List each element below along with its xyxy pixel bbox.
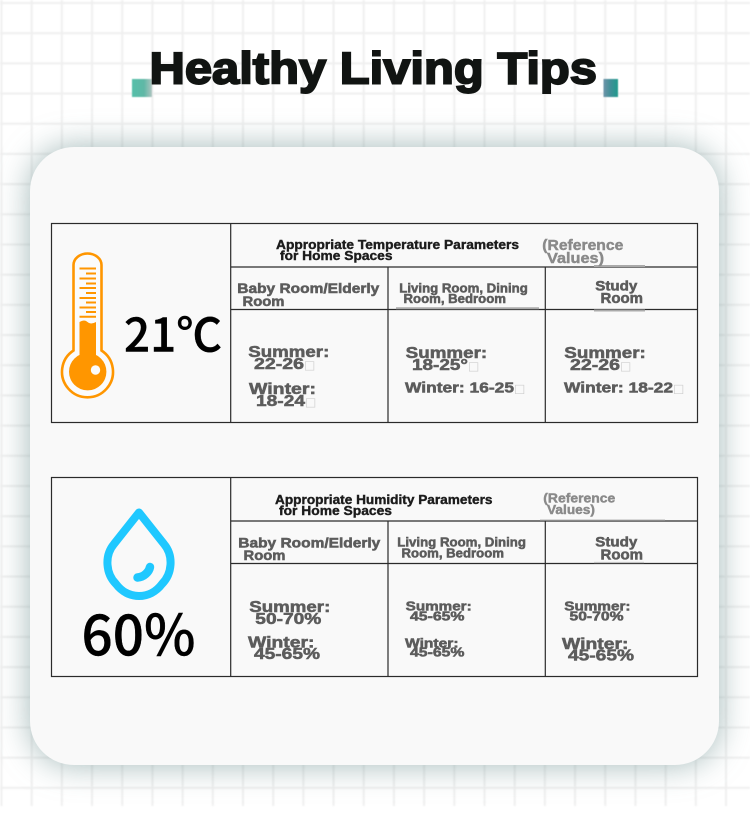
column: baby room: Baby Room/Elderly bbox=[238, 534, 381, 550]
column: baby room bbox=[237, 280, 380, 410]
title: Healthy Living Tips bbox=[150, 44, 597, 94]
column: baby room: Winter: bbox=[249, 381, 316, 398]
table heading bbox=[275, 491, 615, 518]
column: baby room: Summer: bbox=[248, 344, 329, 361]
table heading: for Home Spaces bbox=[280, 248, 392, 263]
column: baby room: 22-26 bbox=[254, 356, 304, 373]
column: living room: Room, Bedroom bbox=[404, 291, 506, 306]
column: study room: Winter: 18-22 bbox=[564, 380, 673, 397]
column: living room: Room, Bedroom bbox=[402, 545, 504, 560]
column: study room: Summer: bbox=[564, 345, 646, 362]
column: living room: 45-65% bbox=[410, 609, 465, 624]
panel: temperature table bbox=[52, 224, 698, 422]
column: study room: Summer: bbox=[564, 599, 630, 614]
column: living room: Summer: bbox=[406, 599, 472, 614]
column: study room: Winter: bbox=[562, 636, 628, 653]
table heading: Values) bbox=[547, 251, 604, 267]
column: living room: □ bbox=[514, 382, 525, 396]
column: study room: 45-65% bbox=[568, 648, 634, 665]
column: living room bbox=[399, 280, 528, 397]
table heading: (Reference bbox=[542, 238, 623, 254]
table heading bbox=[276, 237, 623, 267]
column: baby room: Winter: bbox=[248, 634, 314, 651]
column: living room: Living Room, Dining bbox=[397, 535, 526, 550]
icon: water drop bbox=[107, 512, 171, 596]
column: living room: □ bbox=[468, 359, 479, 373]
column: study room: □ bbox=[620, 359, 631, 373]
column: study room: Room bbox=[600, 547, 643, 563]
table heading: Appropriate Humidity Parameters bbox=[275, 492, 492, 507]
column: study room: Study bbox=[595, 534, 638, 550]
column: study room bbox=[562, 534, 643, 665]
column: baby room: Baby Room/Elderly bbox=[237, 280, 380, 296]
humidity value: 60% bbox=[82, 591, 196, 672]
column: living room: Living Room, Dining bbox=[399, 280, 528, 295]
column: baby room: Summer: bbox=[249, 599, 330, 616]
table heading: (Reference bbox=[543, 491, 615, 506]
column: living room bbox=[397, 535, 526, 660]
column: living room: Summer: bbox=[406, 345, 487, 362]
temperature value: 21℃ bbox=[124, 300, 222, 366]
icon: thermometer bbox=[62, 254, 113, 397]
column: living room: Winter: bbox=[405, 635, 458, 650]
column: living room: 45-65% bbox=[410, 645, 465, 660]
column: study room: Study bbox=[595, 278, 638, 294]
column: study room: □ bbox=[673, 382, 684, 396]
column: baby room: □ bbox=[305, 395, 316, 409]
column: baby room: Room bbox=[244, 547, 286, 563]
table heading: Appropriate Temperature Parameters bbox=[276, 237, 519, 252]
column: baby room: Room bbox=[242, 293, 284, 309]
table heading: Values) bbox=[547, 502, 595, 517]
column: study room bbox=[564, 278, 684, 397]
column: baby room: 18-24 bbox=[256, 393, 305, 410]
panel: main card bbox=[30, 147, 719, 765]
column: baby room: 45-65% bbox=[254, 646, 320, 663]
column: study room: 50-70% bbox=[570, 609, 624, 624]
title accent: left square bbox=[132, 79, 152, 97]
column: baby room: 50-70% bbox=[255, 611, 321, 628]
column: study room: 22-26 bbox=[570, 357, 620, 374]
column: study room: Room bbox=[600, 291, 643, 307]
column: baby room: □ bbox=[304, 358, 315, 372]
title accent: right square bbox=[604, 79, 618, 97]
column: baby room bbox=[238, 534, 381, 663]
column: living room: 18-25° bbox=[412, 357, 468, 374]
panel: humidity table bbox=[52, 478, 698, 676]
table heading: for Home Spaces bbox=[279, 503, 392, 518]
column: living room: Winter: 16-25 bbox=[405, 380, 514, 397]
